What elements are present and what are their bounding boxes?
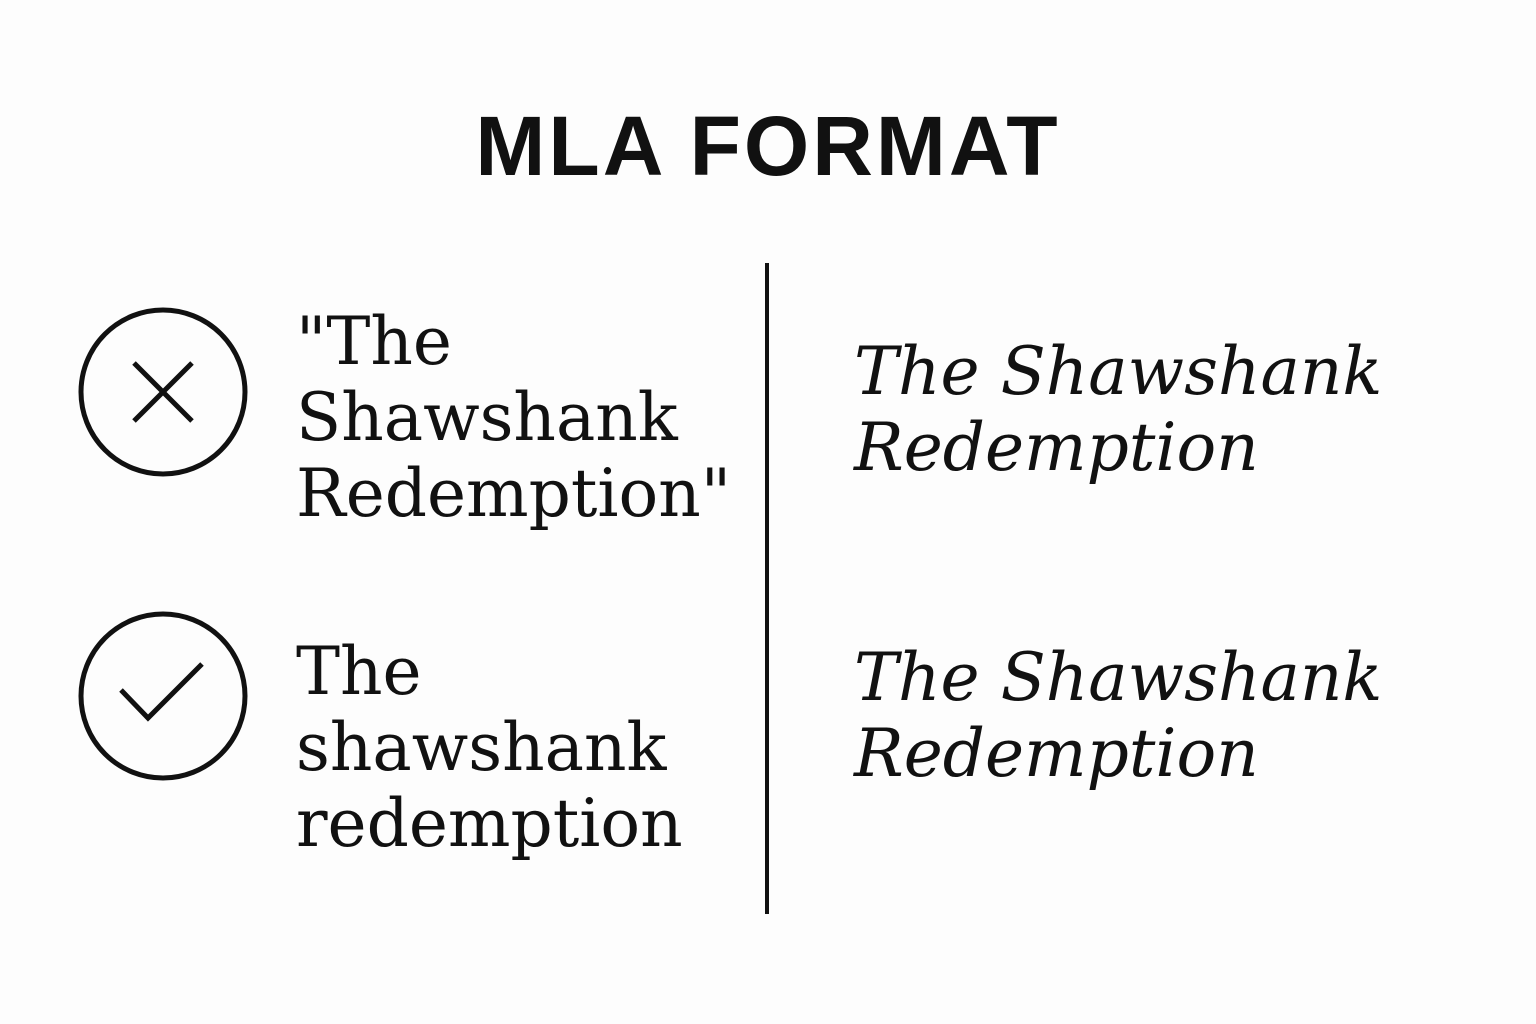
text: wrong example: Redemption" <box>296 455 731 532</box>
icon: wrong cross <box>78 308 248 476</box>
text: wrong example <box>296 303 731 532</box>
text: lowercase example: redemption <box>296 785 683 862</box>
text: lowercase example: shawshank <box>296 709 666 786</box>
text: wrong example: Shawshank <box>296 379 678 456</box>
text: correct italic 1: Redemption <box>854 409 1259 486</box>
text: correct italic 2: Redemption <box>854 715 1259 792</box>
divider line <box>765 263 769 914</box>
text: lowercase example: The <box>296 633 422 710</box>
icon: check <box>78 612 248 780</box>
text: correct italic 2: The Shawshank <box>854 639 1382 716</box>
text: correct italic 2 <box>853 639 1382 792</box>
title: MLA FORMAT <box>475 99 1061 193</box>
text: correct italic 1 <box>853 333 1382 486</box>
text: wrong example: "The <box>296 303 452 380</box>
text: lowercase example <box>296 633 683 862</box>
text: correct italic 1: The Shawshank <box>854 333 1382 410</box>
